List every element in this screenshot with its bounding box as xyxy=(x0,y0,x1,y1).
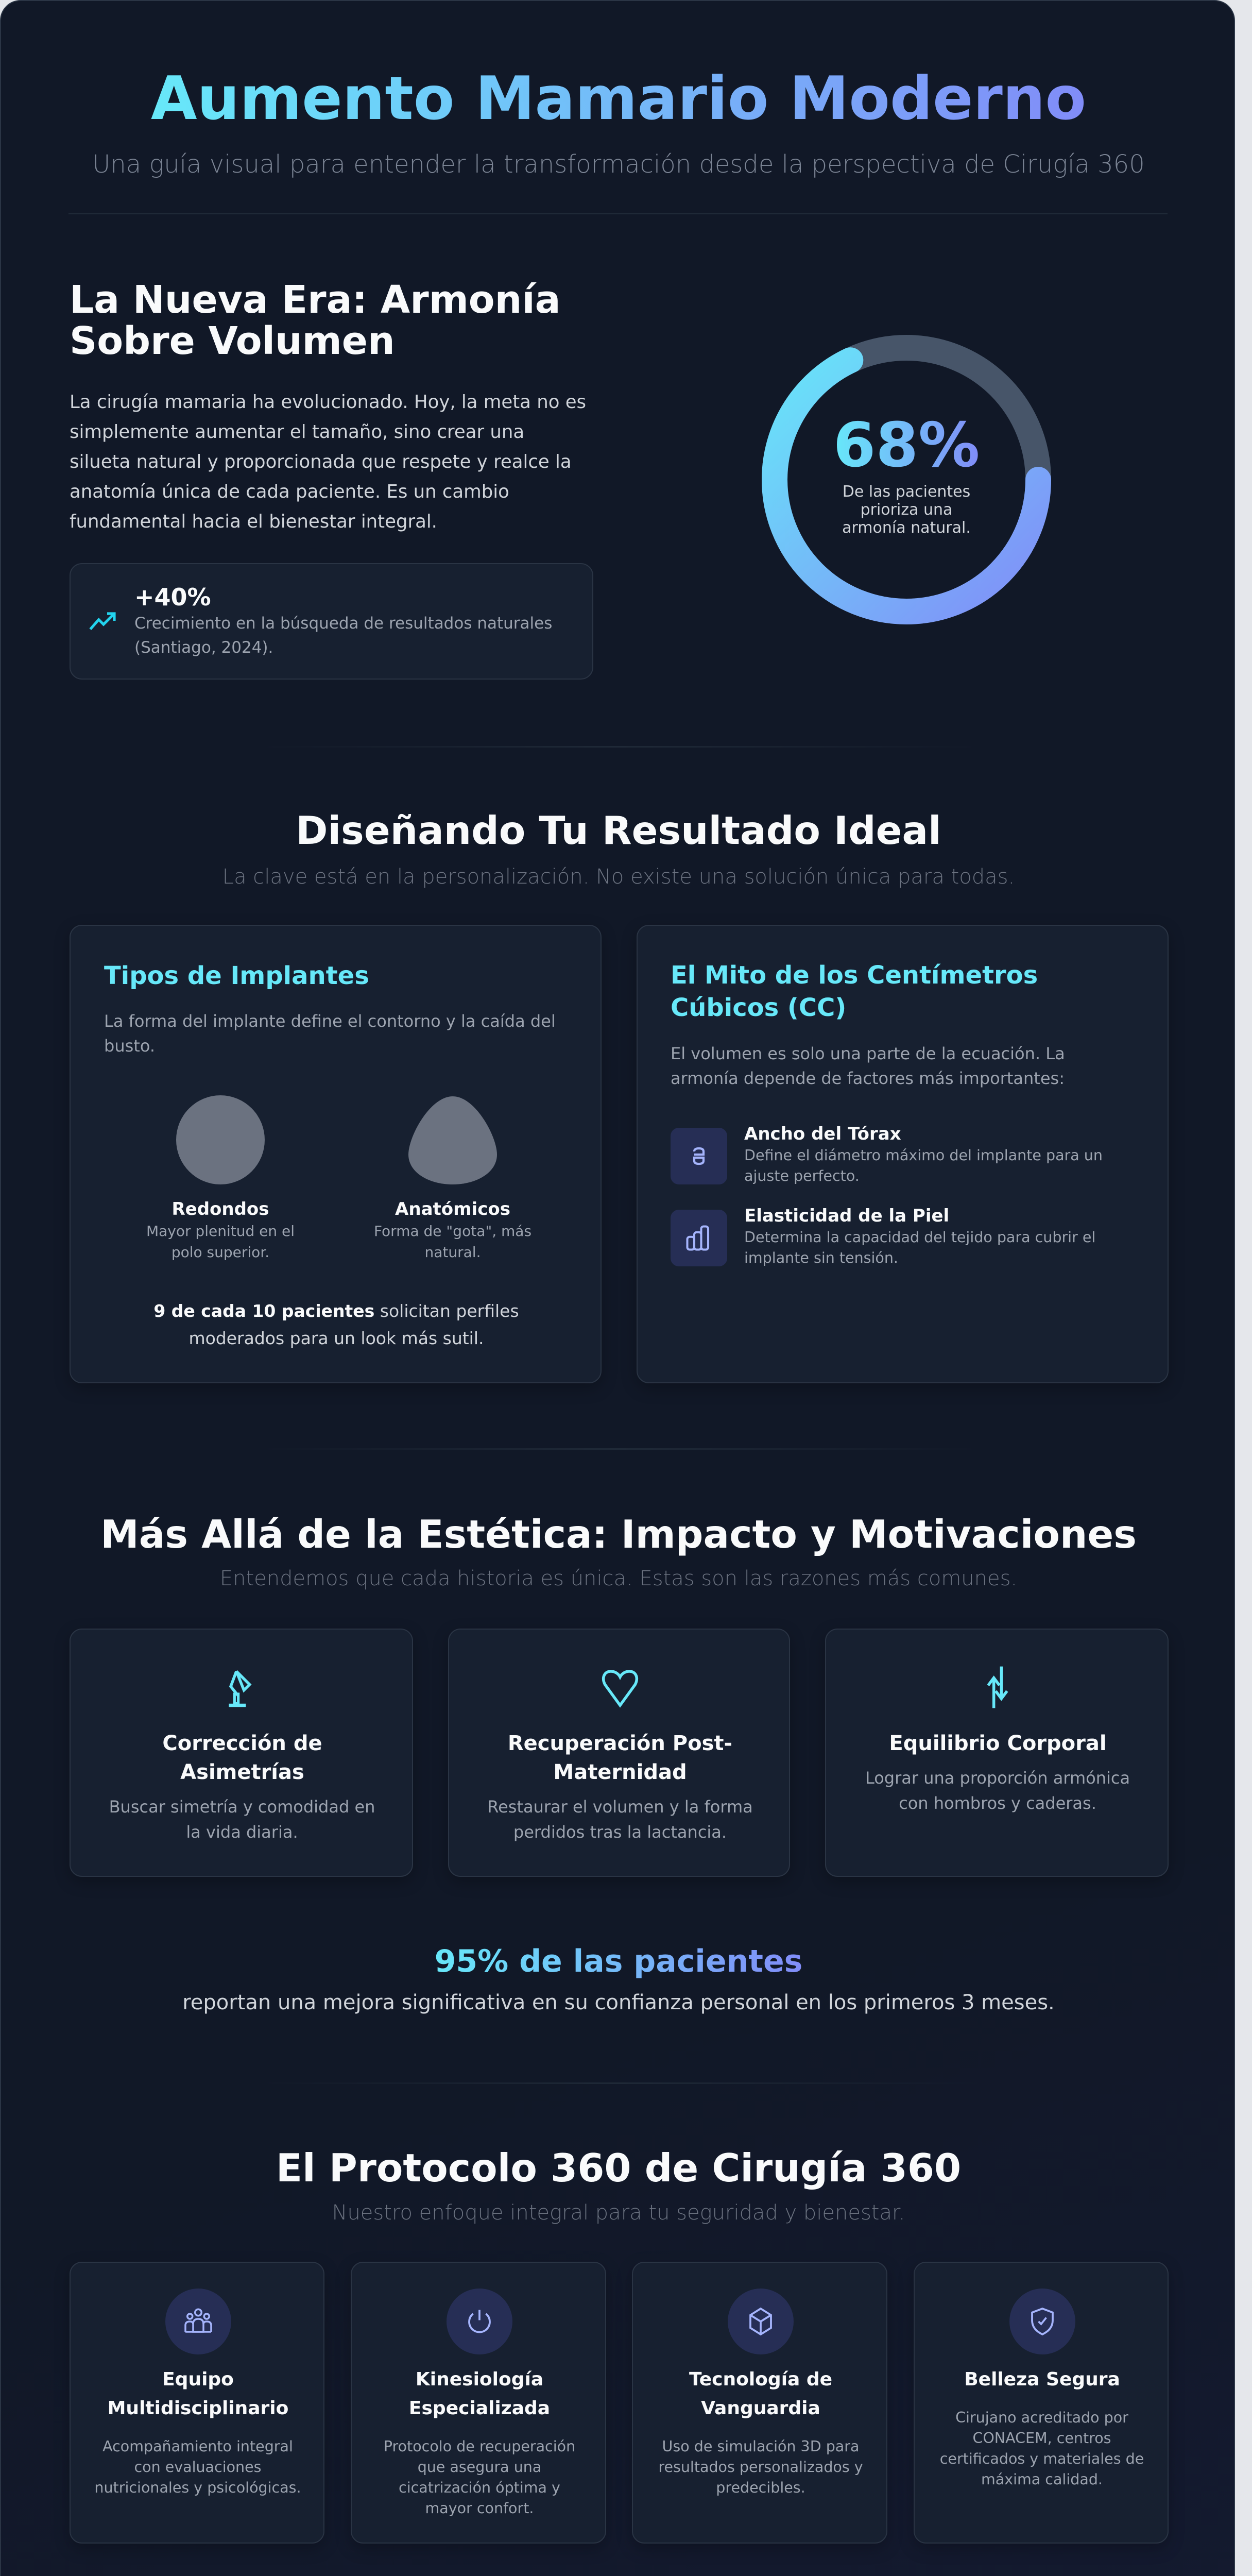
section 1 heading xyxy=(70,278,561,363)
card: equipo xyxy=(70,2262,324,2544)
title: Belleza Segura xyxy=(964,2369,1120,2390)
section 1 paragraph: anatomía única de cada paciente. Es un cambio xyxy=(70,481,509,502)
implant: anatomical: Forma de "gota", más xyxy=(374,1223,531,1240)
description: Buscar simetría y comodidad en la vida diaria. xyxy=(109,1797,375,1842)
heading: Tipos de Implantes xyxy=(104,961,369,990)
implant: anatomical: Anatómicos xyxy=(395,1199,510,1219)
title: Multidisciplinario xyxy=(108,2398,288,2419)
stat text xyxy=(134,583,552,657)
card: kinesiologia xyxy=(351,2262,606,2544)
title xyxy=(108,2369,288,2419)
icon: cube xyxy=(728,2289,794,2354)
title: Vanguardia xyxy=(701,2398,820,2419)
implant: round: Mayor plenitud en el xyxy=(146,1223,295,1240)
donut label xyxy=(833,410,980,537)
icon: arrows xyxy=(987,1666,1008,1708)
panel: tipos de implantes xyxy=(70,925,602,1383)
implant: round: Redondos xyxy=(171,1199,269,1219)
section 3 heading: Más Allá de la Estética: Impacto y Motivaciones xyxy=(100,1512,1137,1557)
card: tecnologia xyxy=(632,2262,887,2544)
donut label: armonía natural. xyxy=(842,519,971,537)
title xyxy=(508,1732,732,1784)
heading: El Mito de los Centímetros Cúbicos (CC) xyxy=(671,961,1038,1022)
stat note: 9 de cada 10 pacientes solicitan perfiles moderados para un look más sutil. xyxy=(153,1301,519,1348)
title: Maternidad xyxy=(553,1760,687,1784)
section 1 heading: Sobre Volumen xyxy=(70,319,395,363)
title: Especializada xyxy=(409,2398,550,2419)
icon: team xyxy=(165,2289,231,2354)
stat text: +40% xyxy=(134,583,211,611)
section 1 heading: La Nueva Era: Armonía xyxy=(70,278,561,322)
title: Kinesiología xyxy=(416,2369,543,2390)
factor: elasticidad: Elasticidad de la Piel xyxy=(744,1206,949,1226)
title xyxy=(162,1732,322,1784)
title xyxy=(689,2369,832,2419)
card: belleza segura xyxy=(914,2262,1169,2544)
title: Tecnología de xyxy=(689,2369,832,2390)
section 1 paragraph: La cirugía mamaria ha evolucionado. Hoy, la meta no es xyxy=(70,392,586,413)
description: Lograr una proporción armónica con hombros y caderas. xyxy=(865,1768,1130,1813)
section 1 paragraph: simplemente aumentar el tamaño, sino crear una xyxy=(70,421,524,443)
title xyxy=(409,2369,550,2419)
implant: anatomical xyxy=(374,1096,531,1261)
section 2 subtitle: La clave está en la personalización. No existe una solución única para todas. xyxy=(222,865,1015,889)
card: equilibrio xyxy=(825,1629,1169,1877)
section 2 heading: Diseñando Tu Resultado Ideal xyxy=(296,808,941,853)
icon: power xyxy=(447,2289,512,2354)
title: Corrección de xyxy=(162,1732,322,1755)
icon: shield xyxy=(1009,2289,1075,2354)
factor: elasticidad: Determina la capacidad del tejido para cubrir el implante sin tensión. xyxy=(744,1229,1095,1266)
description: El volumen es solo una parte de la ecuación. La armonía depende de factores más importantes: xyxy=(671,1044,1065,1088)
description: La forma del implante define el contorno y la caída del busto. xyxy=(104,1011,556,1056)
callout: +40% xyxy=(70,563,593,680)
stat description: reportan una mejora significativa en su confianza personal en los primeros 3 meses. xyxy=(182,1991,1055,2014)
card: post-maternidad xyxy=(448,1629,790,1877)
description: Cirujano acreditado por CONACEM, centros certificados y materiales de máxima calidad. xyxy=(940,2409,1144,2488)
icon: heart xyxy=(602,1670,639,1707)
donut label: De las pacientes xyxy=(843,483,970,501)
section 4 subtitle: Nuestro enfoque integral para tu seguridad y bienestar. xyxy=(332,2201,905,2225)
description: Restaurar el volumen y la forma perdidos tras la lactancia. xyxy=(487,1797,753,1842)
icon: bars xyxy=(671,1210,727,1266)
section 1 paragraph: fundamental hacia el bienestar integral. xyxy=(70,511,437,532)
icon: trending up xyxy=(90,612,116,630)
stat text: Crecimiento en la búsqueda de resultados naturales (Santiago, 2024). xyxy=(134,614,552,657)
title: Aumento Mamario Moderno xyxy=(151,64,1086,133)
section 4 heading: El Protocolo 360 de Cirugía 360 xyxy=(276,2145,961,2191)
donut label: prioriza una xyxy=(861,501,952,519)
title: Recuperación Post- xyxy=(508,1732,732,1755)
description: Protocolo de recuperación que asegura una cicatrización óptima y mayor confort. xyxy=(384,2438,575,2517)
factor: ancho del torax: Define el diámetro máximo del implante para un ajuste perfecto. xyxy=(744,1147,1103,1184)
donut label: 68% xyxy=(833,410,980,481)
section 1 paragraph xyxy=(70,392,586,532)
stat: 95%: 95% de las pacientes xyxy=(435,1943,802,1979)
implant: round: polo superior. xyxy=(171,1244,269,1261)
implant: round xyxy=(146,1095,295,1261)
factor: elasticidad xyxy=(671,1206,1095,1266)
section 3 subtitle: Entendemos que cada historia es única. Estas son las razones más comunes. xyxy=(220,1567,1017,1590)
donut chart 68% xyxy=(762,335,1051,624)
title: Asimetrías xyxy=(180,1760,304,1784)
section 1 paragraph: silueta natural y proporcionada que respete y realce la xyxy=(70,451,572,472)
title: Equilibrio Corporal xyxy=(889,1732,1107,1755)
card: asimetrias xyxy=(70,1629,413,1877)
title: Equipo xyxy=(162,2369,234,2390)
description: Acompañamiento integral con evaluaciones nutricionales y psicológicas. xyxy=(94,2438,301,2496)
description: Uso de simulación 3D para resultados personalizados y predecibles. xyxy=(658,2438,863,2496)
icon: width xyxy=(671,1128,727,1184)
factor: ancho del torax: Ancho del Tórax xyxy=(744,1124,901,1144)
icon: balance xyxy=(229,1670,251,1707)
panel: mito de los cc xyxy=(637,925,1169,1383)
subtitle: Una guía visual para entender la transformación desde la perspectiva de Cirugía 360 xyxy=(92,150,1145,179)
factor: ancho del torax xyxy=(671,1124,1103,1184)
implant: anatomical: natural. xyxy=(424,1244,481,1261)
